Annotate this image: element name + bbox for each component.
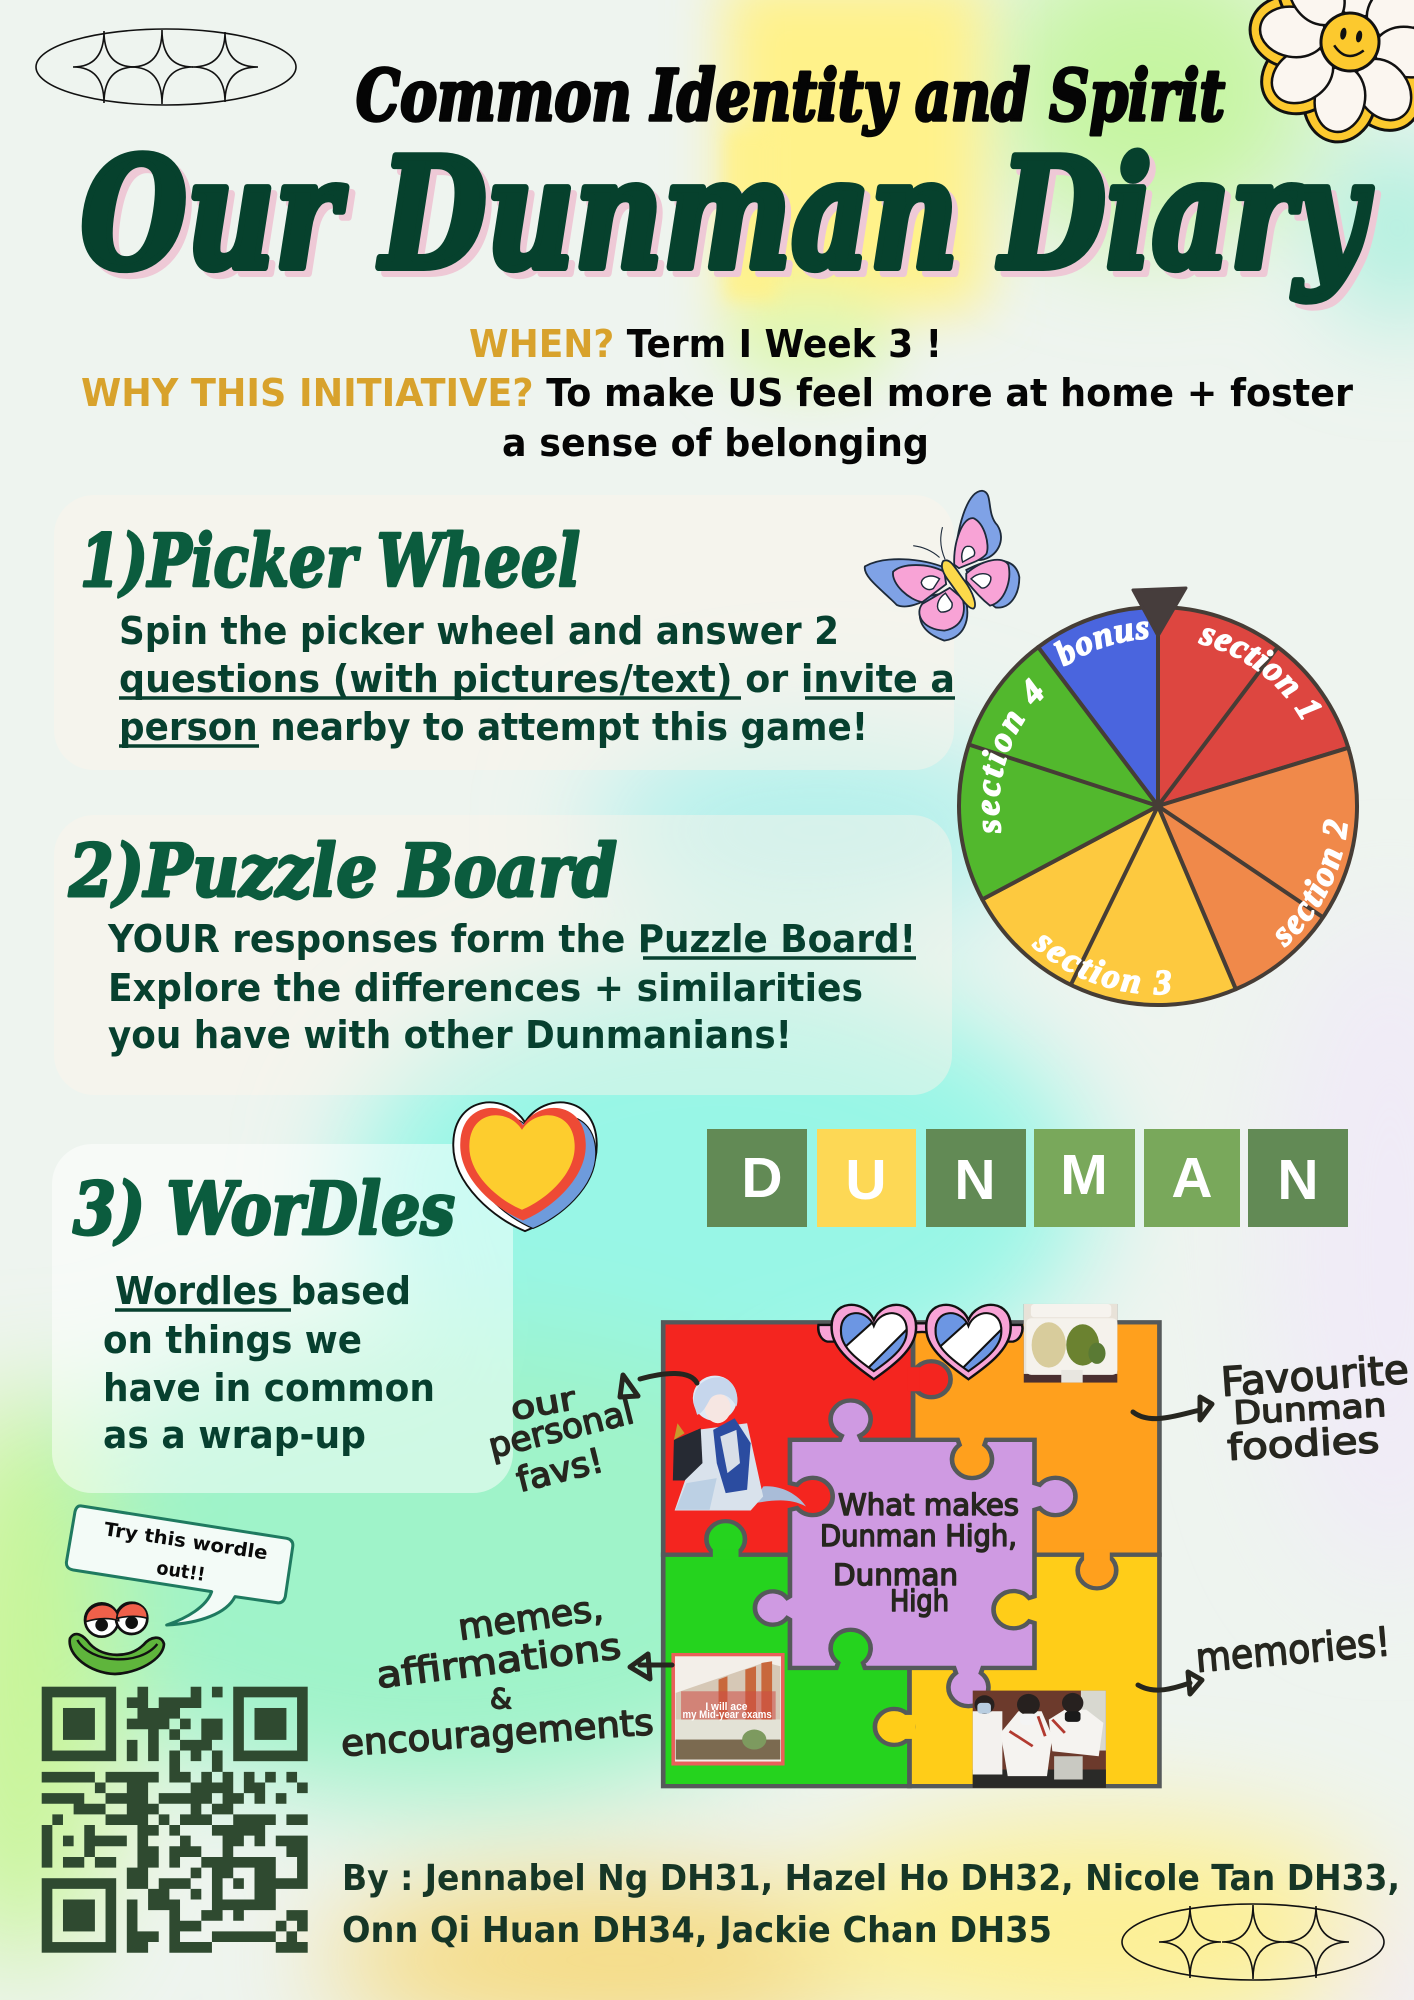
icon: smiling flower [1233, 0, 1414, 159]
annotation: memes, affirmations and encouragements: encouragements [340, 1702, 655, 1765]
annotation: favourite dunman foodies [1219, 1347, 1410, 1469]
annotation: memes, affirmations and encouragements [340, 1588, 655, 1765]
wordle tiles: DUNMAN: N [1277, 1148, 1319, 1212]
centre puzzle handwriting: High [890, 1584, 949, 1618]
when and why text: a sense of belonging [502, 421, 929, 465]
wordles description [103, 1269, 435, 1457]
credits: Onn Qi Huan DH34, Jackie Chan DH35 [342, 1910, 1052, 1951]
chart: spinning picker wheel [957, 586, 1359, 1007]
QR code [42, 1692, 308, 1947]
arrow to memes [630, 1654, 672, 1679]
icon: butterfly [865, 491, 1019, 641]
decoration: sparkle oval top left [36, 29, 296, 105]
wordle tiles: DUNMAN: N [954, 1148, 996, 1212]
meme caption [682, 1702, 772, 1721]
centre puzzle piece [755, 1401, 1075, 1706]
puzzle board description: you have with other Dunmanians! [108, 1013, 792, 1057]
annotation: favourite dunman foodies: Dunman [1232, 1386, 1387, 1432]
annotation: favourite dunman foodies: foodies [1226, 1420, 1380, 1469]
icon: heart sticker [453, 1102, 597, 1231]
credits [342, 1858, 1400, 1951]
puzzle board description: Explore the differences + similarities [108, 966, 863, 1010]
panel: wordles [52, 1144, 513, 1493]
arrow to memories [1138, 1672, 1202, 1694]
wheel labels: section 2 [1276, 819, 1348, 948]
meme caption: my Mid-year exams [682, 1709, 772, 1721]
centre puzzle handwriting: Dunman [833, 1558, 958, 1592]
when and why text: WHY THIS INITIATIVE? To make US feel more at home + foster [81, 371, 1353, 415]
when and why text [81, 322, 1353, 465]
annotation: memories: memories! [1194, 1619, 1392, 1682]
speech bubble text: Try this wordle [103, 1519, 269, 1564]
heading: puzzle board: 2)Puzzle Board [68, 828, 617, 913]
wheel labels: section 3 [1031, 935, 1171, 996]
annotation: memes, affirmations and encouragements: affirmations [374, 1626, 623, 1697]
heading: picker wheel: 1)Picker Wheel [80, 518, 580, 603]
photo: food box [1024, 1304, 1117, 1383]
photo: anime character [673, 1376, 806, 1510]
annotation: our personal favs: personal [485, 1392, 638, 1467]
puzzle board description [107, 917, 916, 1057]
annotation: memes, affirmations and encouragements: memes, [456, 1588, 606, 1649]
heading: wordles: 3) WorDles [73, 1166, 455, 1251]
wheel pointer [1133, 588, 1186, 636]
centre puzzle handwriting [820, 1488, 1019, 1618]
speech bubble text [103, 1519, 269, 1586]
puzzle board description: YOUR responses form the Puzzle Board! [107, 917, 916, 961]
wordle tiles: DUNMAN [707, 1129, 1348, 1227]
annotation: our personal favs: our [508, 1379, 579, 1428]
annotation: memes, affirmations and encouragements: & [490, 1682, 512, 1715]
when and why text: WHEN? Term I Week 3 ! [469, 322, 942, 366]
wordle tiles: DUNMAN: A [1171, 1146, 1213, 1210]
decoration: sparkle oval bottom right [1122, 1904, 1384, 1980]
wheel labels: bonus [1053, 621, 1149, 666]
puzzle board diagram [663, 1322, 1159, 1786]
wordles description: Wordles based [115, 1269, 411, 1313]
meme caption: I will ace [705, 1702, 747, 1713]
wheel labels: section 1 [1198, 628, 1322, 720]
panel: picker wheel [54, 495, 955, 770]
annotation: our personal favs: favs! [513, 1441, 608, 1501]
wordles description: have in common [103, 1366, 435, 1410]
picker wheel instructions: questions (with pictures/text) or invite a [119, 657, 955, 701]
arrow to personal favs [620, 1373, 697, 1397]
centre puzzle handwriting: What makes [838, 1488, 1019, 1522]
photo: students at work [973, 1691, 1106, 1788]
picker wheel instructions [119, 609, 955, 749]
icon: heart sunglasses [818, 1305, 1022, 1383]
wordle tiles: DUNMAN: D [741, 1146, 783, 1210]
wordles description: as a wrap-up [103, 1413, 366, 1457]
centre puzzle handwriting: Dunman High, [820, 1519, 1017, 1553]
panel: puzzle board [54, 815, 952, 1095]
picker wheel instructions: person nearby to attempt this game! [119, 705, 868, 749]
wordle tiles: DUNMAN: M [1060, 1143, 1108, 1207]
arrow to foodies [1133, 1397, 1212, 1420]
picker wheel instructions: Spin the picker wheel and answer 2 [119, 609, 839, 653]
icon: frog [70, 1603, 164, 1674]
annotation: our personal favs [485, 1379, 638, 1501]
wordles description: on things we [103, 1318, 362, 1362]
speech bubble [66, 1506, 293, 1625]
speech bubble text: out!! [155, 1558, 207, 1586]
photo: meme with school building [671, 1653, 785, 1766]
wordle tiles: DUNMAN: U [845, 1148, 887, 1212]
wheel labels: section 4 [982, 678, 1044, 834]
annotation: favourite dunman foodies: Favourite [1219, 1347, 1410, 1406]
wheel labels [982, 621, 1348, 996]
